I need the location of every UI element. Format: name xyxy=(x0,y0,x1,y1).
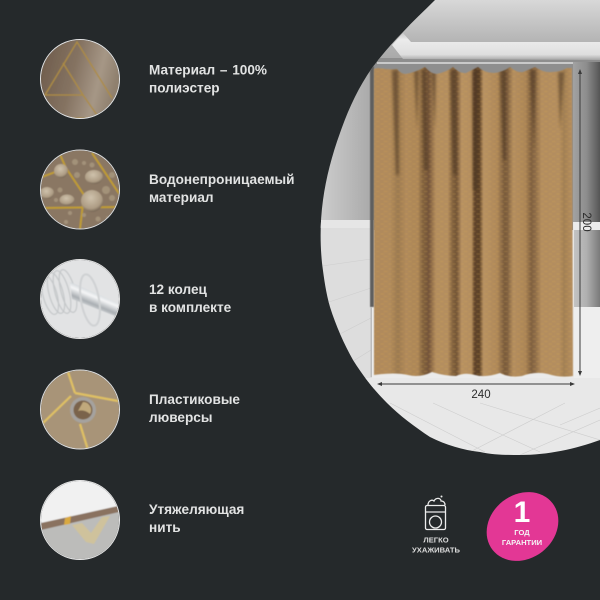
text: rings: в комплекте xyxy=(149,300,232,315)
wall behind curtain xyxy=(372,58,600,230)
floor xyxy=(365,378,600,455)
icon: water drops xyxy=(41,150,119,228)
text: weighted thread: нить xyxy=(149,520,181,535)
width arrow xyxy=(377,382,575,386)
icon: rings on rod xyxy=(41,260,119,338)
curtain xyxy=(374,66,573,378)
icon: material fabric xyxy=(41,40,119,118)
text: material: Материал – 100% xyxy=(149,62,267,78)
icon ring: rings xyxy=(40,260,120,338)
text: easy care: УХАЖИВАТЬ xyxy=(412,546,460,554)
wall right lower xyxy=(573,230,600,307)
tiles left xyxy=(320,220,374,390)
icon ring: weighted thread xyxy=(40,480,120,560)
text: material: полиэстер xyxy=(149,80,220,96)
wall left xyxy=(321,66,374,220)
crown molding xyxy=(392,33,600,60)
icon: washing machine xyxy=(426,496,446,530)
icon ring: grommet xyxy=(40,370,120,449)
text: weighted thread: Утяжеляющая xyxy=(149,502,244,517)
baseboard right xyxy=(573,222,600,230)
icon ring: water drops xyxy=(40,150,120,229)
frame line lower xyxy=(370,307,372,377)
width label: 240 xyxy=(471,389,491,401)
text: grommets: Пластиковые xyxy=(149,392,240,407)
badge: warranty xyxy=(473,478,572,575)
wall right xyxy=(573,62,600,222)
text: waterproof: Водонепроницаемый xyxy=(149,172,295,187)
text: waterproof: материал xyxy=(149,190,214,205)
bathtub base xyxy=(574,307,600,378)
baseboard left xyxy=(320,220,374,228)
height arrow xyxy=(578,69,582,376)
height label: 200 xyxy=(580,212,592,232)
ceiling xyxy=(378,0,600,60)
badge text: ГАРАНТИИ xyxy=(502,538,542,547)
dark strip left of curtain xyxy=(370,66,374,307)
text: rings: 12 колец xyxy=(149,282,207,297)
tile lines xyxy=(322,259,600,455)
lower backdrop behind curtain xyxy=(372,230,574,380)
rod xyxy=(377,62,573,64)
text: easy care: ЛЕГКО xyxy=(423,536,449,544)
icon: weighted thread xyxy=(41,481,119,559)
icon ring: material xyxy=(40,40,120,118)
badge number: 1 xyxy=(514,496,530,529)
text: grommets: люверсы xyxy=(149,410,212,425)
icon: grommet xyxy=(41,370,119,448)
badge text: ГОД xyxy=(514,528,530,537)
panel: bathroom photo with curtain xyxy=(320,0,600,458)
